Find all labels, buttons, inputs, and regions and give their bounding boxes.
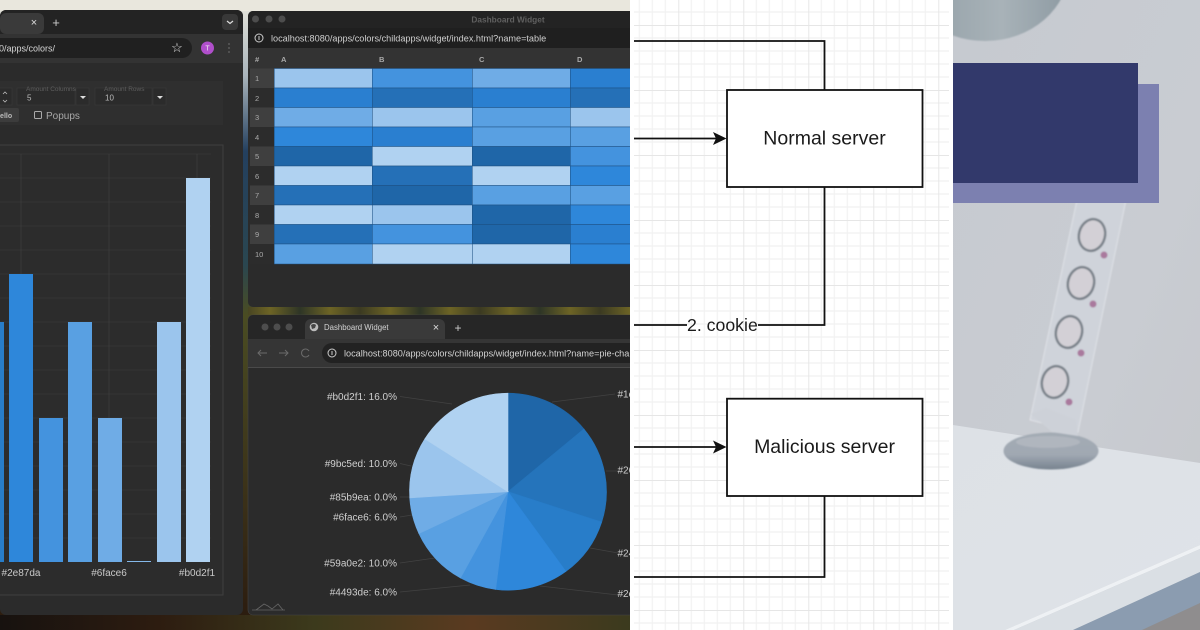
icon: profile avatar bbox=[201, 42, 214, 54]
table header: # bbox=[255, 55, 260, 64]
light purple rectangle bbox=[953, 84, 1159, 203]
window: pie chart browser bbox=[248, 314, 630, 616]
table row numbers: 2 bbox=[255, 94, 259, 103]
address bar bbox=[248, 28, 648, 48]
box: normal server bbox=[727, 90, 922, 187]
ceiling dome bbox=[953, 0, 1061, 42]
pie labels right bbox=[618, 390, 630, 597]
box: malicious server: Malicious server bbox=[754, 436, 895, 458]
toolbar bbox=[248, 339, 652, 368]
table row numbers: 1 bbox=[255, 74, 259, 83]
window dots bbox=[252, 16, 286, 22]
icon: mountain logo bbox=[252, 604, 285, 610]
table header: C bbox=[479, 55, 485, 64]
pie slices bbox=[410, 393, 607, 590]
new tab button: + bbox=[52, 15, 60, 30]
pie labels right: #247fd0: 10.0% bbox=[618, 548, 688, 560]
table header: A bbox=[281, 55, 287, 64]
leader lines bbox=[400, 394, 618, 595]
field: amount rows bbox=[104, 86, 163, 100]
connector: top line to normal server bbox=[634, 41, 824, 90]
arrow: into normal server bbox=[634, 132, 726, 145]
window title: Dashboard Widget bbox=[471, 14, 545, 24]
browser tab: × bbox=[31, 17, 37, 29]
axis labels: #6face6 bbox=[91, 568, 127, 579]
icon: browser menu bbox=[228, 43, 230, 53]
tab menu button bbox=[222, 14, 238, 30]
address bar: localhost:8080/apps/colors/childapps/widget/index.html?name=table bbox=[271, 34, 546, 44]
box: malicious server bbox=[727, 399, 922, 496]
pie labels left: #b0d2f1: 16.0% bbox=[327, 392, 397, 403]
panel: server diagram bbox=[630, 0, 953, 630]
lamp bbox=[1004, 200, 1126, 470]
table row numbers: 5 bbox=[255, 152, 259, 161]
axis labels bbox=[2, 568, 215, 576]
connector label: 2. cookie bbox=[687, 315, 758, 335]
browser tab bbox=[305, 319, 445, 339]
pie labels left bbox=[324, 392, 397, 598]
table colour cells bbox=[274, 68, 648, 264]
pie chart bbox=[324, 390, 630, 597]
dark navy rectangle bbox=[953, 63, 1138, 183]
checkbox: popups: Popups bbox=[46, 111, 80, 122]
window: table widget bbox=[248, 11, 648, 307]
arrow: into malicious server bbox=[634, 440, 726, 454]
browser tab: × bbox=[433, 322, 439, 334]
shelf top bbox=[953, 425, 1200, 630]
table row numbers: 7 bbox=[255, 191, 259, 200]
browser tab: Dashboard Widget bbox=[324, 323, 389, 332]
field: amount columns: 5 bbox=[27, 94, 32, 102]
lamp tube bbox=[1030, 200, 1126, 432]
address bar bbox=[0, 38, 192, 58]
box: normal server: Normal server bbox=[763, 128, 886, 150]
lamp pink beads bbox=[1066, 252, 1108, 406]
lamp base bbox=[1004, 432, 1098, 470]
pie labels left: #85b9ea: 0.0% bbox=[330, 492, 397, 504]
field: amount rows: Amount Rows bbox=[104, 86, 145, 93]
stepper bbox=[2, 92, 8, 102]
table row numbers: 9 bbox=[255, 230, 259, 239]
field: amount columns: Amount Columns bbox=[26, 86, 77, 93]
pie labels left: #4493de: 6.0% bbox=[330, 588, 397, 598]
panel: lamp photo bbox=[953, 0, 1200, 630]
table row numbers: 8 bbox=[255, 211, 259, 220]
table header: D bbox=[577, 55, 583, 64]
icon: profile avatar: T bbox=[205, 46, 210, 52]
axis labels: #2e87da bbox=[2, 568, 41, 579]
axis labels: #b0d2f1 bbox=[179, 568, 216, 579]
panel: dashboard screenshots bbox=[0, 0, 690, 630]
browser tab bbox=[0, 13, 44, 34]
table row numbers: 6 bbox=[255, 172, 259, 181]
window: bar chart browser bbox=[0, 10, 243, 615]
table header bbox=[255, 57, 582, 62]
connector: bottom line bbox=[634, 496, 824, 577]
table row numbers: 3 bbox=[255, 113, 259, 122]
control panel bbox=[0, 86, 166, 122]
field: amount columns bbox=[26, 86, 86, 100]
pie labels right: #2e87da: 12.0% bbox=[618, 589, 690, 600]
table header: B bbox=[379, 55, 385, 64]
new tab button: + bbox=[454, 321, 462, 335]
address bar: 0/apps/colors/ bbox=[0, 44, 56, 54]
button: hello bbox=[0, 108, 19, 122]
pie labels left: #9bc5ed: 10.0% bbox=[325, 459, 397, 470]
connector: cookie line bbox=[634, 187, 824, 325]
table row numbers: 10 bbox=[255, 250, 263, 259]
pie labels right: #1e66a8: 14.0% bbox=[618, 390, 690, 400]
lamp bottom fitting bbox=[1031, 408, 1078, 436]
pie labels right: #2670b7: 16.0% bbox=[618, 466, 690, 476]
pie labels left: #59a0e2: 10.0% bbox=[324, 558, 397, 570]
field: amount rows: 10 bbox=[105, 94, 114, 102]
shelf front bbox=[1005, 545, 1200, 630]
table row numbers: 4 bbox=[255, 133, 259, 142]
pie labels left: #6face6: 6.0% bbox=[333, 512, 397, 524]
bars bbox=[0, 178, 210, 562]
table row numbers bbox=[250, 68, 274, 264]
bar chart bbox=[0, 145, 223, 595]
toolbar: localhost:8080/apps/colors/childapps/widget/index.html?name=pie-chart bbox=[344, 348, 635, 358]
lamp rings bbox=[1038, 216, 1109, 401]
icon: bookmark star: ☆ bbox=[171, 40, 183, 55]
window dots bbox=[262, 324, 292, 330]
